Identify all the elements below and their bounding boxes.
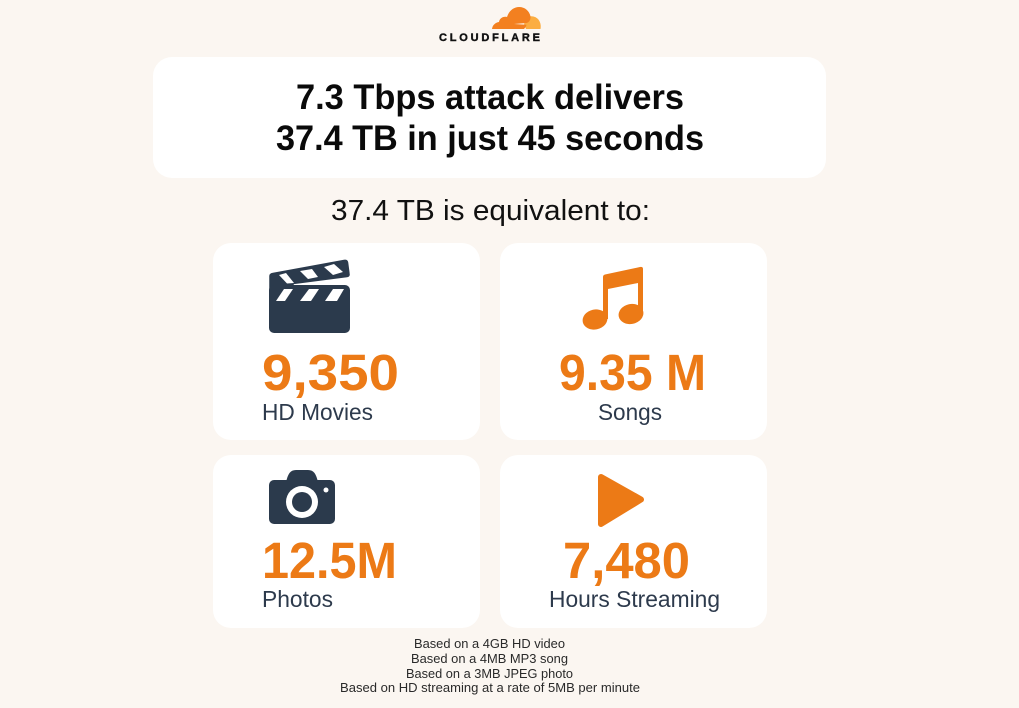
footnotes: Based on a 4GB HD video <box>414 637 565 651</box>
heading: 37.4 TB in just 45 seconds <box>276 119 704 158</box>
panel: HD movies <box>213 243 480 440</box>
number: 12.5M <box>262 532 397 589</box>
heading <box>276 78 704 158</box>
footnotes: Based on a 4MB MP3 song <box>411 652 568 666</box>
icon: play <box>601 477 641 524</box>
label: Hours Streaming <box>549 586 720 612</box>
icon: camera <box>269 470 335 524</box>
icon: music note <box>581 267 645 332</box>
footnotes: Based on HD streaming at a rate of 5MB per minute <box>340 681 640 695</box>
label: Photos <box>262 586 333 612</box>
heading: 7.3 Tbps attack delivers <box>296 78 684 117</box>
subheading: 37.4 TB is equivalent to: <box>331 195 650 227</box>
panel: photos <box>213 455 480 628</box>
footnotes <box>340 637 640 695</box>
number: 7,480 <box>563 532 690 589</box>
icon: cloud <box>492 7 541 29</box>
logo: Cloudflare <box>439 7 541 44</box>
wordmark: CLOUDFLARE <box>439 32 540 44</box>
icon: clapperboard <box>269 260 350 333</box>
label: Songs <box>598 399 662 425</box>
panel: hours streaming <box>500 455 767 628</box>
panel: headline <box>153 57 826 178</box>
number: 9,350 <box>262 344 399 401</box>
panel: songs <box>500 243 767 440</box>
number: 9.35 M <box>559 344 706 401</box>
footnotes: Based on a 3MB JPEG photo <box>406 667 573 681</box>
label: HD Movies <box>262 399 373 425</box>
